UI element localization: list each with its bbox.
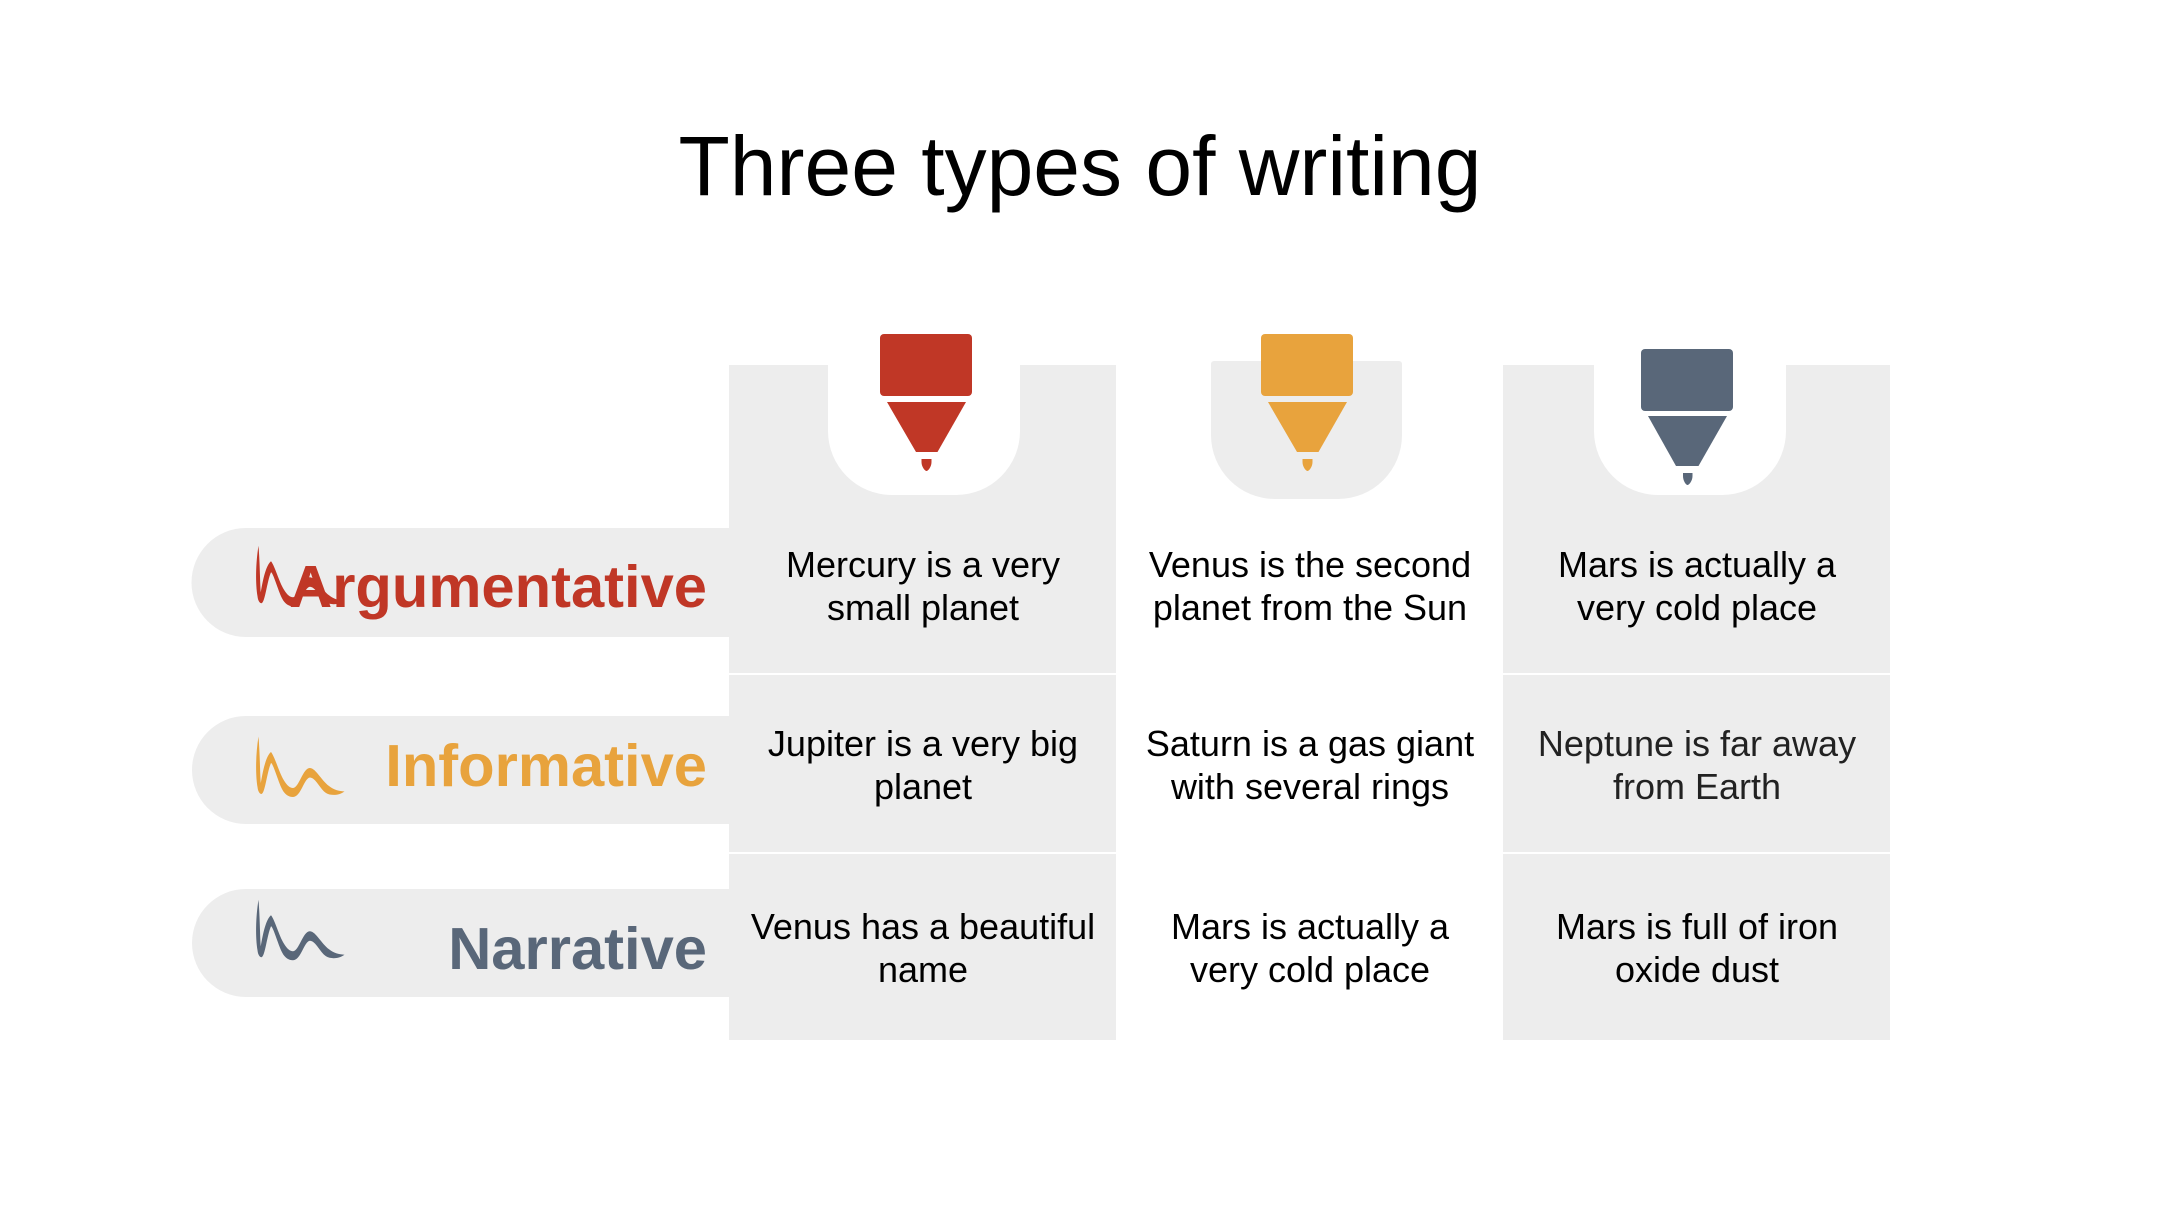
text: Venus name: Venus has a beautiful <box>751 906 1095 947</box>
text: Venus: planet from the Sun <box>1153 587 1467 628</box>
text: Jupiter: planet <box>874 766 972 807</box>
icon: slate pen <box>1641 349 1733 485</box>
row label: Argumentative <box>191 528 729 637</box>
text: Mars dust: Mars is full of iron <box>1556 906 1838 947</box>
icon: red scribble <box>256 546 344 606</box>
column panel with notch <box>729 365 1116 1040</box>
text: Venus: Venus is the second <box>1149 544 1471 585</box>
column 2: orange <box>1146 334 1474 990</box>
icon: orange pen <box>1261 334 1353 471</box>
pill background <box>192 716 729 824</box>
pill background <box>191 528 729 637</box>
text: Neptune: from Earth <box>1613 766 1781 807</box>
row label: Narrative <box>192 889 729 997</box>
column 1: red <box>729 334 1116 1040</box>
title: Three types of writing <box>678 119 1482 213</box>
column panel with notch <box>1503 365 1890 1040</box>
label text: Narrative <box>448 915 707 982</box>
text: Mars: very cold place <box>1577 587 1817 628</box>
text: Mercury: small planet <box>827 587 1019 628</box>
text: Venus name: name <box>878 949 968 990</box>
text: Mars cold: Mars is actually a <box>1171 906 1450 947</box>
text: Mars dust: oxide dust <box>1615 949 1779 990</box>
icon: slate scribble <box>256 900 344 960</box>
top panel <box>1211 361 1402 499</box>
label text: Argumentative <box>289 553 707 620</box>
text: Mars cold: very cold place <box>1190 949 1430 990</box>
text: Saturn: Saturn is a gas giant <box>1146 723 1474 764</box>
text: Saturn: with several rings <box>1170 766 1449 807</box>
icon: orange scribble <box>256 736 344 797</box>
pill background <box>192 889 729 997</box>
text: Mars: Mars is actually a <box>1558 544 1837 585</box>
text: Neptune: Neptune is far away <box>1538 723 1856 764</box>
text: Jupiter: Jupiter is a very big <box>768 723 1078 764</box>
label text: Informative <box>385 732 707 799</box>
column 3: slate <box>1503 349 1890 1040</box>
text: Mercury: Mercury is a very <box>786 544 1060 585</box>
row label: Informative <box>192 716 729 824</box>
icon: red pen <box>880 334 972 471</box>
